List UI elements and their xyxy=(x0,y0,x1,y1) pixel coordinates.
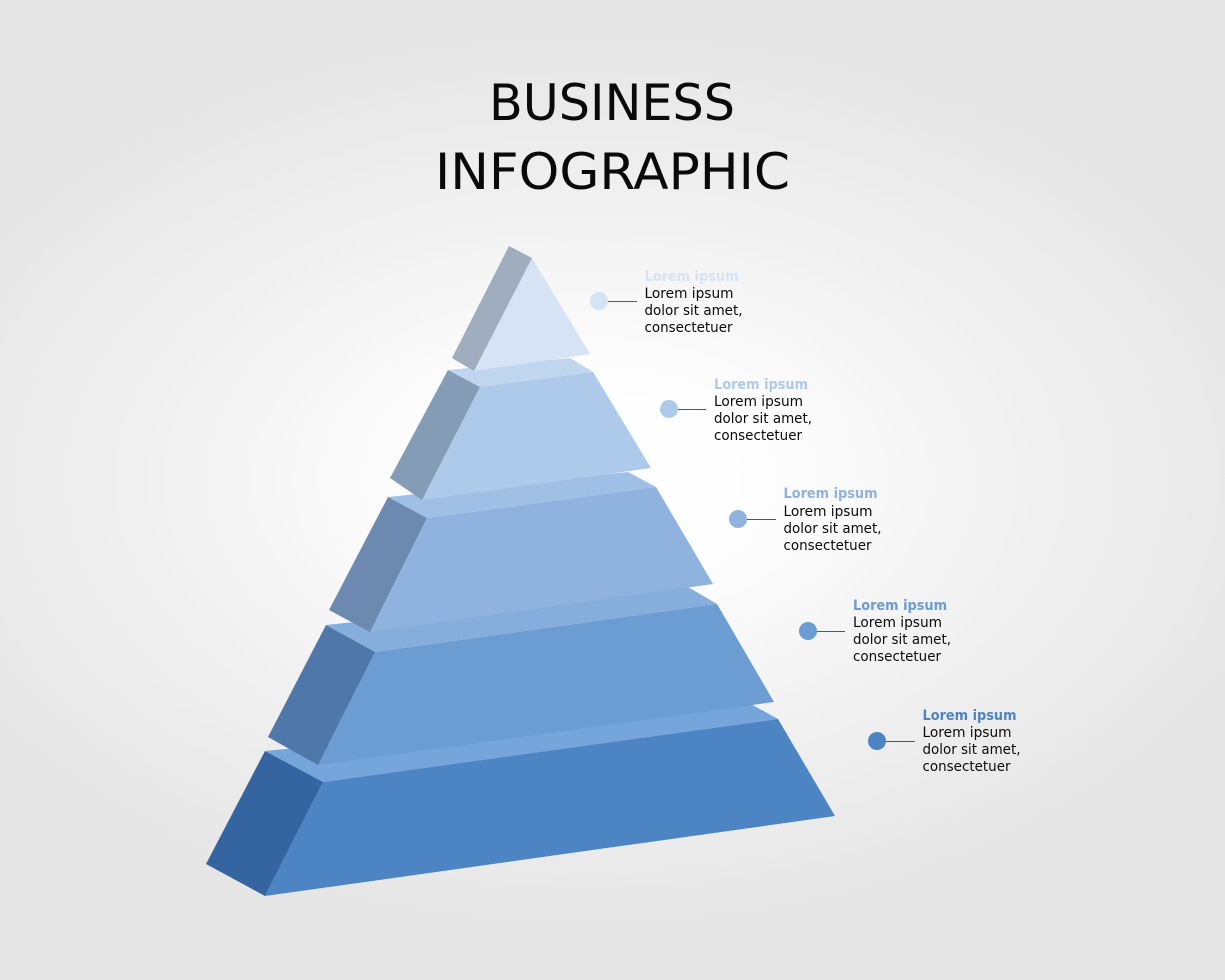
callout 3 xyxy=(729,486,882,554)
text 4: Lorem ipsum xyxy=(853,598,947,614)
pyramid layer 3 xyxy=(329,472,713,632)
text 3: consectetuer xyxy=(784,538,872,554)
text 5 xyxy=(922,708,1020,775)
text 2: Lorem ipsum xyxy=(714,377,808,393)
text 1: dolor sit amet, xyxy=(644,303,742,319)
marker 3 xyxy=(729,510,776,528)
text 1: Lorem ipsum xyxy=(644,286,734,302)
text 3: dolor sit amet, xyxy=(784,521,882,537)
pyramid layer 2 xyxy=(390,358,651,500)
title: BUSINESS xyxy=(489,74,735,132)
marker 5 xyxy=(868,732,915,750)
text 2: dolor sit amet, xyxy=(714,411,812,427)
callout 1 xyxy=(590,269,742,336)
callout 2 xyxy=(660,377,812,444)
text 2: consectetuer xyxy=(714,428,802,444)
callout 4 xyxy=(799,598,951,665)
text 3: Lorem ipsum xyxy=(784,486,878,502)
text 2 xyxy=(714,377,812,444)
text 4: dolor sit amet, xyxy=(853,632,951,648)
text 1: consectetuer xyxy=(644,320,733,336)
title xyxy=(435,74,790,201)
marker 4 xyxy=(799,622,845,640)
callout 5 xyxy=(868,708,1020,775)
pyramid layer 1 (top) xyxy=(452,246,590,371)
text 5: dolor sit amet, xyxy=(922,742,1020,758)
marker 1 xyxy=(590,292,637,310)
text 5: Lorem ipsum xyxy=(922,708,1016,724)
text 4: consectetuer xyxy=(853,649,941,665)
pyramid layer 4 xyxy=(268,587,774,765)
pyramid layer 5 (bottom) xyxy=(206,703,835,896)
text 5: Lorem ipsum xyxy=(922,725,1012,741)
text 2: Lorem ipsum xyxy=(714,394,803,410)
text 4: Lorem ipsum xyxy=(853,615,942,631)
text 5: consectetuer xyxy=(922,759,1011,775)
text 1 xyxy=(644,269,742,336)
pyramid xyxy=(206,246,835,896)
text 4 xyxy=(853,598,951,665)
text 3 xyxy=(784,486,882,554)
title: INFOGRAPHIC xyxy=(435,143,790,201)
marker 2 xyxy=(660,400,706,418)
text 1: Lorem ipsum xyxy=(644,269,738,285)
text 3: Lorem ipsum xyxy=(784,504,872,520)
